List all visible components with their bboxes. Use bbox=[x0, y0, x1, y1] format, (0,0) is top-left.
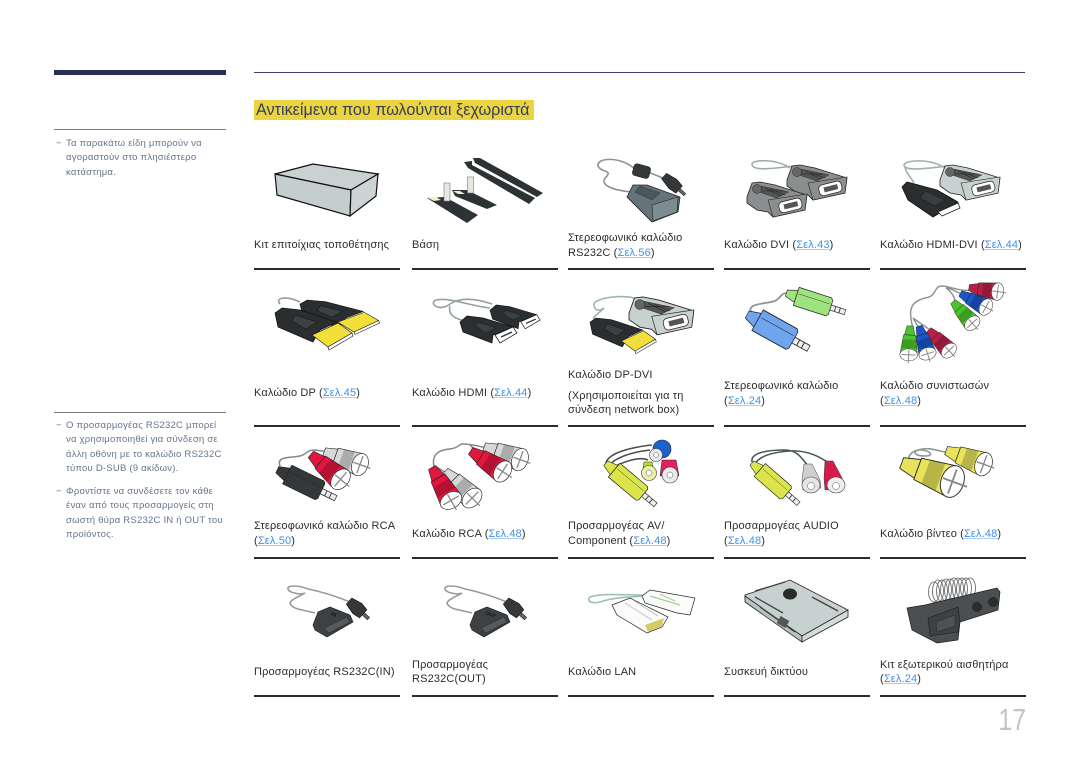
label: stereo RS232C cable: Στερεοφωνικό καλώδιο bbox=[568, 232, 682, 244]
label: stereo cable bbox=[724, 380, 838, 407]
label: DVI cable: Καλώδιο DVI (Σελ.43) bbox=[724, 239, 833, 251]
label: RS232C OUT adapter bbox=[412, 659, 488, 685]
sidebar note: connect adapters: σωστή θύρα RS232C IN ή OUT του bbox=[66, 515, 223, 526]
icon: RS232C OUT adapter: OUT bbox=[484, 610, 496, 620]
label: HDMI cable: Καλώδιο HDMI (Σελ.44) bbox=[412, 387, 531, 399]
label: component cable bbox=[880, 380, 989, 407]
icon: external sensor kit bbox=[907, 578, 1000, 643]
sidebar note: connect adapters bbox=[56, 486, 223, 540]
sidebar note: connect adapters: Φροντίστε να συνδέσετε τον κάθε bbox=[66, 486, 213, 497]
label: component cable: Καλώδιο συνιστωσών bbox=[880, 380, 989, 392]
icon: DVI cable bbox=[747, 161, 847, 217]
label: external sensor kit bbox=[880, 659, 1008, 685]
sidebar note: where to buy: αγοραστούν στο πλησιέστερο bbox=[66, 152, 196, 163]
icon: RCA cable bbox=[422, 436, 534, 516]
icon: HDMI-DVI cable bbox=[902, 161, 1000, 217]
label: DP-DVI cable: σύνδεση network box) bbox=[568, 404, 679, 416]
label: AUDIO adapter: Προσαρμογέας AUDIO bbox=[724, 520, 839, 532]
label: wall mount kit: Κιτ επιτοίχιας τοποθέτησης bbox=[254, 239, 389, 251]
icon: stand bbox=[427, 158, 543, 223]
icon: RS232C IN adapter: IN bbox=[330, 611, 337, 619]
label: HDMI-DVI cable: Καλώδιο HDMI-DVI (Σελ.44) bbox=[880, 239, 1022, 251]
icon: RS232C OUT adapter bbox=[445, 586, 530, 637]
sidebar top bar bbox=[54, 70, 226, 75]
label: DP-DVI cable: Καλώδιο DP-DVI bbox=[568, 369, 653, 381]
label: RS232C IN adapter: Προσαρμογέας RS232C(IN) bbox=[254, 666, 395, 678]
label: RS232C OUT adapter: Προσαρμογέας bbox=[412, 659, 488, 671]
sidebar rule bbox=[54, 129, 226, 130]
page number: 17 bbox=[998, 702, 1026, 737]
icon: LAN cable bbox=[589, 590, 695, 633]
label: stereo cable: (Σελ.24) bbox=[724, 395, 765, 407]
sidebar note: connect adapters: − bbox=[56, 486, 62, 497]
label: stereo cable: Στερεοφωνικό καλώδιο bbox=[724, 380, 838, 392]
sidebar note: where to buy: κατάστημα. bbox=[66, 167, 116, 178]
label: DP cable: Καλώδιο DP (Σελ.45) bbox=[254, 387, 360, 399]
icon: DP-DVI cable bbox=[590, 297, 694, 354]
icon: stereo RCA cable bbox=[273, 441, 374, 507]
label: stereo RS232C cable: RS232C (Σελ.56) bbox=[568, 247, 655, 259]
sidebar note: where to buy: Τα παρακάτω είδη μπορούν να bbox=[66, 138, 202, 149]
sidebar note: where to buy: − bbox=[56, 138, 62, 149]
label: AV component adapter bbox=[568, 520, 670, 547]
sidebar note: RS232C adapter: άλλη οθόνη με το καλώδιο RS232C bbox=[66, 449, 222, 460]
icon: HDMI cable bbox=[433, 299, 540, 343]
icon: network box bbox=[745, 580, 848, 642]
label: stereo RCA cable: Στερεοφωνικό καλώδιο RCA bbox=[254, 520, 395, 532]
label: stereo RCA cable: (Σελ.50) bbox=[254, 535, 295, 547]
sidebar note: RS232C adapter: τύπου D-SUB (9 ακίδων). bbox=[66, 463, 179, 474]
label: RS232C OUT adapter: RS232C(OUT) bbox=[412, 673, 486, 685]
label: stereo RS232C cable bbox=[568, 232, 682, 259]
label: external sensor kit: (Σελ.24) bbox=[880, 673, 921, 685]
label: stereo RCA cable bbox=[254, 520, 395, 547]
label: LAN cable: Καλώδιο LAN bbox=[568, 666, 636, 678]
icon: stereo cable bbox=[741, 284, 848, 359]
label: DP-DVI cable: (Χρησιμοποιείται για τη bbox=[568, 390, 684, 402]
label: DP-DVI cable bbox=[568, 369, 684, 416]
label: AUDIO adapter bbox=[724, 520, 839, 547]
label: AUDIO adapter: (Σελ.48) bbox=[724, 535, 765, 547]
label: AV component adapter: Component (Σελ.48) bbox=[568, 535, 670, 547]
header rule bbox=[254, 72, 1025, 73]
sidebar note: RS232C adapter: Ο προσαρμογέας RS232C μπορεί bbox=[66, 420, 216, 431]
sidebar note: RS232C adapter bbox=[56, 420, 222, 474]
icon: AUDIO adapter bbox=[746, 450, 845, 510]
label: component cable: (Σελ.48) bbox=[880, 395, 921, 407]
icon: DP cable bbox=[275, 298, 380, 350]
icon: wall mount kit box bbox=[275, 164, 378, 216]
sidebar rule 2 bbox=[54, 412, 226, 413]
label: video cable: Καλώδιο βίντεο (Σελ.48) bbox=[880, 528, 1001, 540]
sidebar note: connect adapters: έναν από τους προσαρμογείς στη bbox=[66, 500, 214, 511]
sidebar note: RS232C adapter: να χρησιμοποιηθεί για σύνδεση σε bbox=[66, 434, 218, 445]
section heading: Αντικείμενα που πωλούνται ξεχωριστά bbox=[256, 101, 529, 119]
label: network box: Συσκευή δικτύου bbox=[724, 666, 808, 678]
icon: RS232C IN adapter bbox=[288, 586, 373, 637]
icon: stereo RS232C cable bbox=[598, 159, 689, 222]
sidebar note: where to buy bbox=[56, 138, 202, 178]
icon: component cable bbox=[899, 279, 1007, 364]
label: AV component adapter: Προσαρμογέας AV/ bbox=[568, 520, 665, 532]
sidebar note: RS232C adapter: − bbox=[56, 420, 62, 431]
label: RCA cable: Καλώδιο RCA (Σελ.48) bbox=[412, 528, 526, 540]
icon: AV component adapter bbox=[600, 440, 679, 512]
sidebar note: connect adapters: προϊόντος. bbox=[66, 529, 114, 540]
label: stand: Βάση bbox=[412, 239, 439, 251]
label: external sensor kit: Κιτ εξωτερικού αισθητήρα bbox=[880, 659, 1008, 671]
icon: video cable bbox=[896, 439, 999, 502]
